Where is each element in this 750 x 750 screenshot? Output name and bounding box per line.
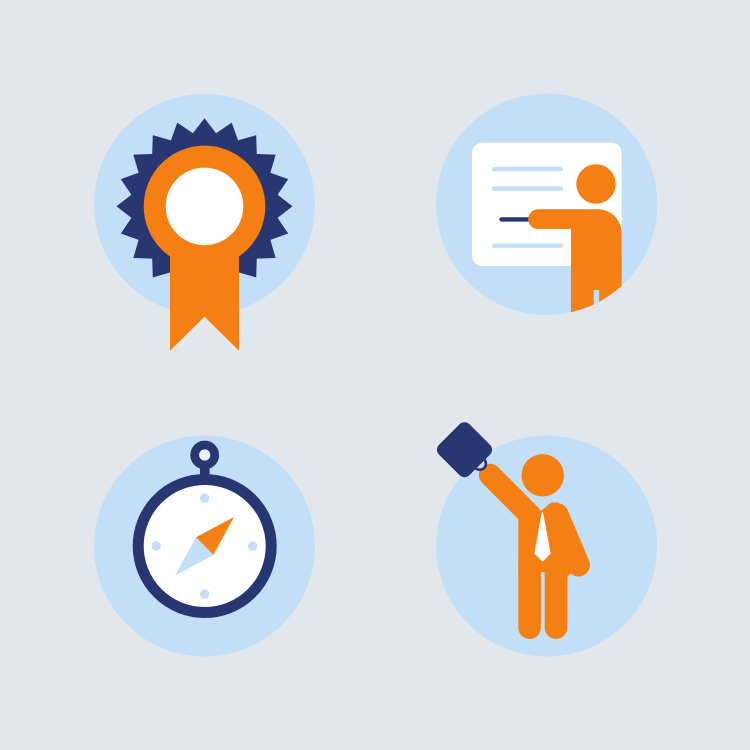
whiteboard [472, 143, 622, 266]
rosette white centre [166, 168, 243, 245]
infographic canvas [94, 94, 658, 656]
whiteboard text lines [492, 167, 563, 248]
panel: compass icon [94, 436, 315, 656]
rosette background circle [94, 94, 315, 315]
compass loop and stem [195, 445, 215, 479]
rosette navy starburst [116, 118, 292, 294]
businessman background circle [436, 436, 657, 656]
presenter background circle [436, 94, 657, 315]
panel: businessman with briefcase icon [434, 419, 657, 656]
panel: award rosette icon [94, 94, 315, 351]
rosette orange ribbon and medal [144, 146, 265, 351]
briefcase [434, 419, 495, 480]
compass background circle [94, 436, 315, 656]
necktie [534, 512, 551, 562]
presenter figure [528, 164, 622, 330]
compass cardinal dots [152, 493, 257, 599]
businessman figure [490, 454, 578, 628]
compass needle [175, 517, 234, 576]
panel: presenter at whiteboard icon [436, 94, 657, 330]
pointer stick [499, 217, 531, 222]
compass body [138, 480, 271, 612]
briefcase handle [474, 457, 486, 470]
